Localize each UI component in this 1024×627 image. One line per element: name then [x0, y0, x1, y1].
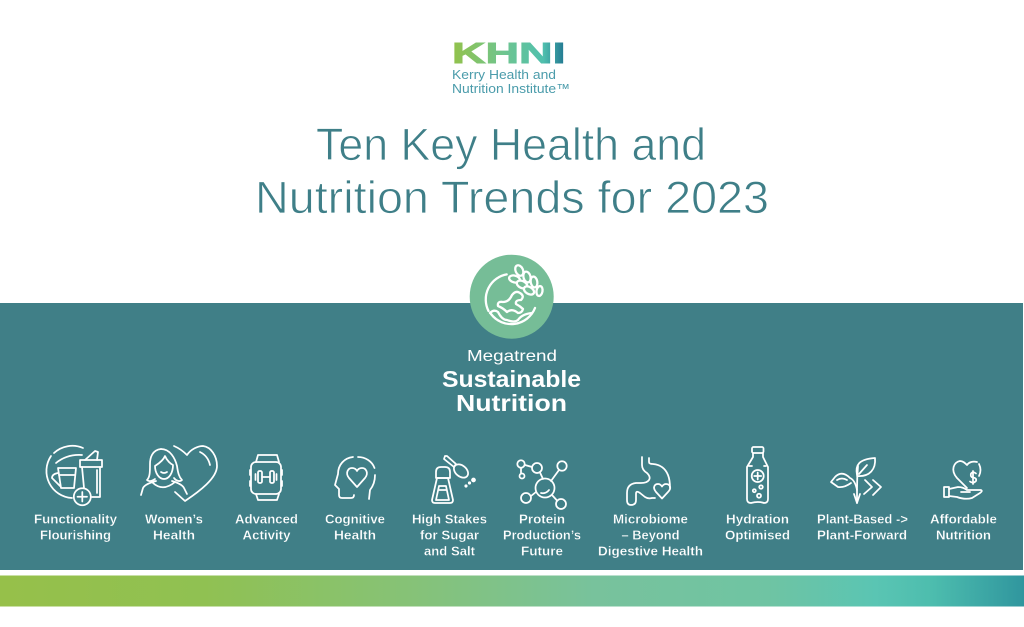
label: Women's Health: Women’s [145, 512, 203, 526]
logo: KHNI: Nutrition Institute™ [452, 81, 570, 96]
label: High Stakes for Sugar and Salt [412, 512, 487, 558]
label: Microbiome Beyond Digestive Health: Microbiome [613, 512, 688, 526]
label: Affordable Nutrition [930, 512, 997, 542]
icon: hand holding heart [944, 461, 982, 499]
icon: hydration bottle [747, 447, 768, 503]
logo: KHNI: Kerry Health and [452, 67, 556, 82]
title [255, 119, 769, 223]
label: Women's Health: Health [153, 528, 195, 542]
label: High Stakes for Sugar and Salt: and Salt [424, 544, 476, 558]
label: Advanced Activity: Activity [242, 528, 291, 542]
label: Plant-Based to Plant-Forward: Plant-Forward [817, 528, 907, 542]
icon: functionality flourishing [46, 446, 102, 505]
icon: microbiome stomach [627, 457, 670, 505]
label: Hydration Optimised [725, 512, 790, 542]
label: High Stakes for Sugar and Salt: for Sugar [420, 528, 479, 542]
heading: Megatrend Sustainable Nutrition [442, 348, 581, 416]
label: Functionality Flourishing: Functionality [34, 512, 118, 526]
icon: salt shaker and spoon [432, 456, 475, 503]
label: Protein Production's Future: Protein [519, 512, 565, 526]
gradient band [0, 576, 1024, 606]
label: High Stakes for Sugar and Salt: High Stakes [412, 512, 487, 526]
label: Functionality Flourishing [34, 512, 118, 542]
title: Nutrition Trends for 2023 [255, 172, 769, 223]
icon: advanced activity watch [250, 455, 282, 500]
heading: Megatrend Sustainable Nutrition: Nutrition [456, 390, 567, 416]
icon: women's health [141, 446, 217, 501]
icon: protein molecule [517, 460, 567, 509]
label: Hydration Optimised: Hydration [726, 512, 789, 526]
label: Cognitive Health [325, 512, 385, 542]
label: Cognitive Health: Health [334, 528, 376, 542]
logo: KHNI [452, 38, 570, 96]
label: Hydration Optimised: Optimised [725, 528, 790, 542]
label: Advanced Activity [235, 512, 298, 542]
label: Women's Health [145, 512, 203, 542]
label: Functionality Flourishing: Flourishing [40, 528, 111, 542]
icon: plant with chevrons [831, 458, 881, 503]
icon: globe and wheat badge [470, 255, 554, 339]
label: Microbiome Beyond Digestive Health [598, 512, 703, 558]
label: Affordable Nutrition: Nutrition [936, 528, 991, 542]
panel: teal megatrend panel [0, 303, 1023, 570]
label: Protein Production's Future [503, 512, 581, 558]
label: Advanced Activity: Advanced [235, 512, 298, 526]
label: Cognitive Health: Cognitive [325, 512, 385, 526]
label: Microbiome Beyond Digestive Health: – Beyond [622, 528, 680, 542]
label: Protein Production's Future: Future [521, 544, 563, 558]
heading: Megatrend Sustainable Nutrition: Megatrend [467, 348, 557, 365]
label: Plant-Based to Plant-Forward [817, 512, 908, 542]
icon: cognitive health head [335, 457, 375, 499]
title: Ten Key Health and [316, 119, 706, 170]
label: Plant-Based to Plant-Forward: Plant-Based -> [817, 512, 908, 526]
label: Protein Production's Future: Production’s [503, 528, 581, 542]
logo: KHNI: KHNI [452, 38, 566, 70]
heading: Megatrend Sustainable Nutrition: Sustainable [442, 366, 581, 392]
label: Affordable Nutrition: Affordable [930, 512, 997, 526]
label: Microbiome Beyond Digestive Health: Digestive Health [598, 544, 703, 558]
